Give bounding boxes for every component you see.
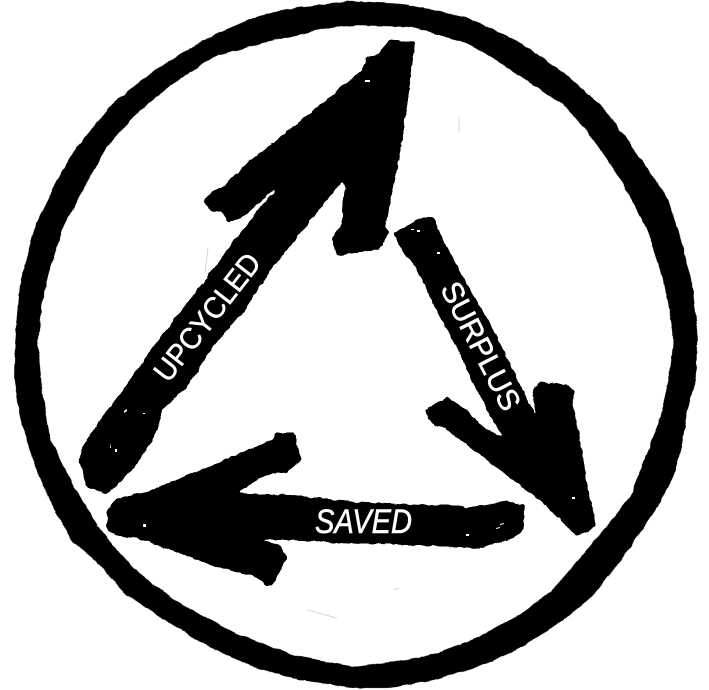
arrow: saved (107, 433, 525, 586)
label: SAVED: SAVED (315, 503, 412, 541)
label: UPCYCLED: UPCYCLED (148, 247, 268, 388)
arrow: surplus (393, 217, 596, 536)
arrow: upcycled (78, 40, 415, 494)
label: SURPLUS: SURPLUS (434, 277, 527, 416)
